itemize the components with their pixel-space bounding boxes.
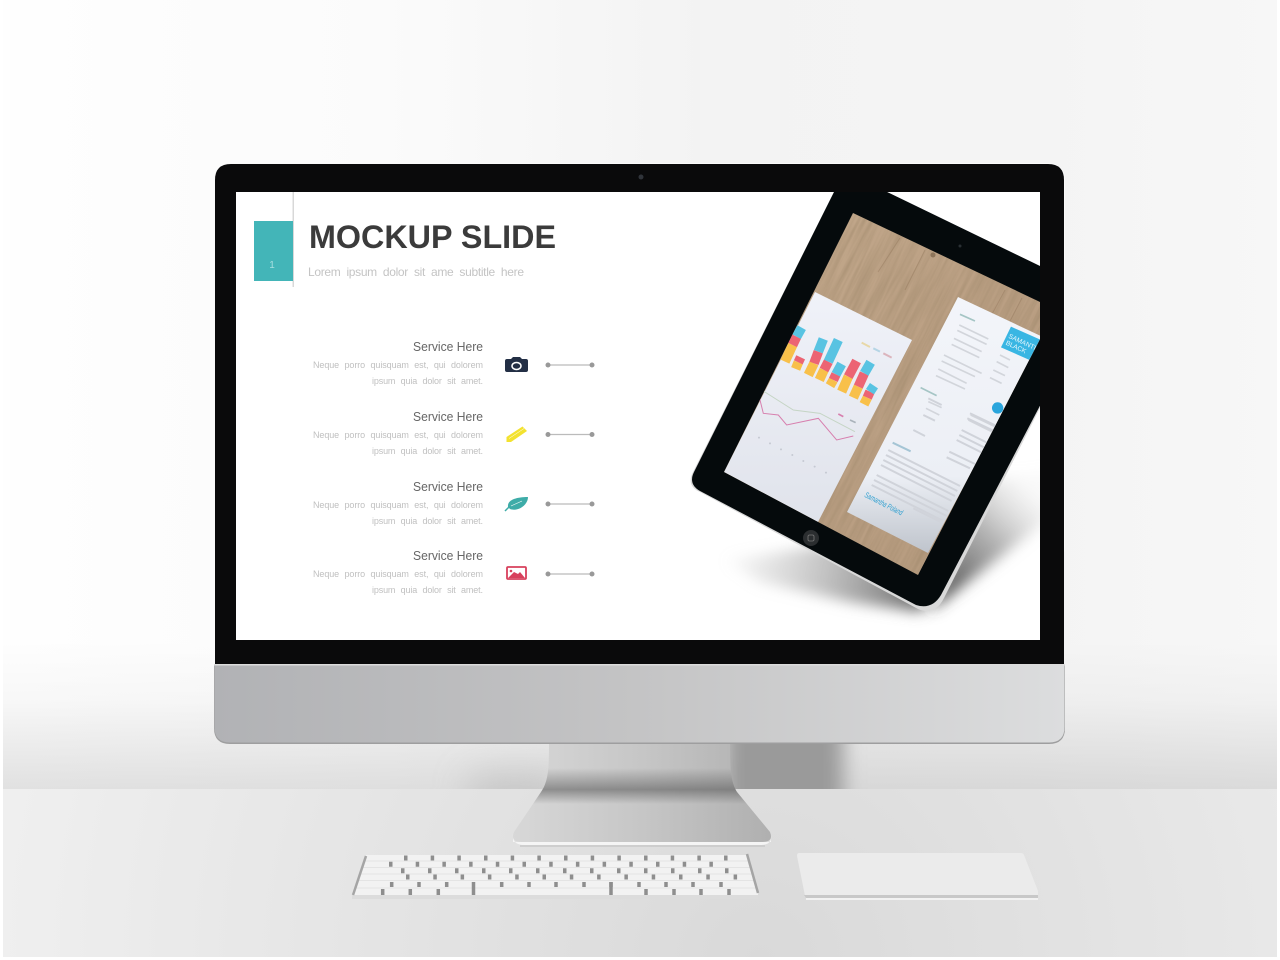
resume blue name box: BLACK [1004, 340, 1028, 356]
connector line [546, 572, 594, 576]
signature: Samantha Poland [863, 490, 905, 518]
resume blue name box: SAMANTH [1007, 333, 1040, 353]
tablet body [691, 190, 1044, 611]
service row 3: Neque porro quisquam est, qui dolorem [313, 500, 483, 510]
slide number tab [254, 192, 294, 287]
black bezel [215, 164, 1064, 664]
trackpad [797, 853, 1038, 900]
chart paper [724, 292, 912, 522]
wood surface [724, 213, 1040, 575]
tablet camera [958, 244, 962, 248]
resume avatar [992, 402, 1003, 414]
monitor [214, 164, 1065, 847]
service row 2: Neque porro quisquam est, qui dolorem [313, 430, 483, 440]
slide panel [236, 192, 1040, 640]
service row 2 [313, 409, 594, 456]
silver chin [214, 664, 1065, 744]
service row 4: ipsum quia dolor sit amet. [372, 585, 483, 595]
resume paper [847, 297, 1045, 553]
background: wall and desk [3, 684, 1277, 957]
service row 3: ipsum quia dolor sit amet. [372, 516, 483, 526]
icon: leaf [505, 497, 528, 511]
keyboard [352, 854, 758, 899]
home button [803, 530, 819, 546]
monitor stand [510, 744, 775, 846]
key row lines [356, 861, 756, 888]
icon: pencil [506, 426, 527, 442]
tablet photo [690, 192, 1040, 621]
icon: camera [505, 357, 528, 372]
chart legend [862, 343, 892, 358]
slide number tab: 1 [269, 260, 275, 271]
resume details [921, 314, 1045, 432]
service row 2: Service Here [413, 409, 483, 424]
title: MOCKUP SLIDE [309, 219, 556, 255]
service row 3: Service Here [413, 479, 483, 494]
service row 1 [313, 339, 594, 386]
keyboard side edges [353, 856, 366, 895]
resume blue name box [1001, 326, 1040, 360]
service row 4: Neque porro quisquam est, qui dolorem [313, 569, 483, 579]
service row 1: Neque porro quisquam est, qui dolorem [313, 360, 483, 370]
icon: picture [507, 567, 526, 579]
resume body text [863, 398, 997, 522]
connector line [546, 502, 594, 506]
service row 1: ipsum quia dolor sit amet. [372, 376, 483, 386]
connector line [546, 432, 594, 437]
webcam [638, 174, 644, 180]
service row 2: ipsum quia dolor sit amet. [372, 446, 483, 456]
key gaps [383, 858, 745, 895]
connector line [546, 362, 594, 368]
service row 1: Service Here [413, 339, 483, 354]
tablet shadow [742, 478, 1040, 621]
line chart [758, 391, 856, 474]
subtitle: Lorem ipsum dolor sit ame subtitle here [308, 265, 524, 279]
service row 4: Service Here [413, 548, 483, 563]
resume text lines [921, 314, 1010, 432]
service row 3 [313, 479, 594, 526]
tablet screen [724, 213, 1040, 575]
monitor body [214, 163, 1065, 563]
stacked bar chart [785, 328, 874, 404]
service row 4 [313, 548, 594, 595]
